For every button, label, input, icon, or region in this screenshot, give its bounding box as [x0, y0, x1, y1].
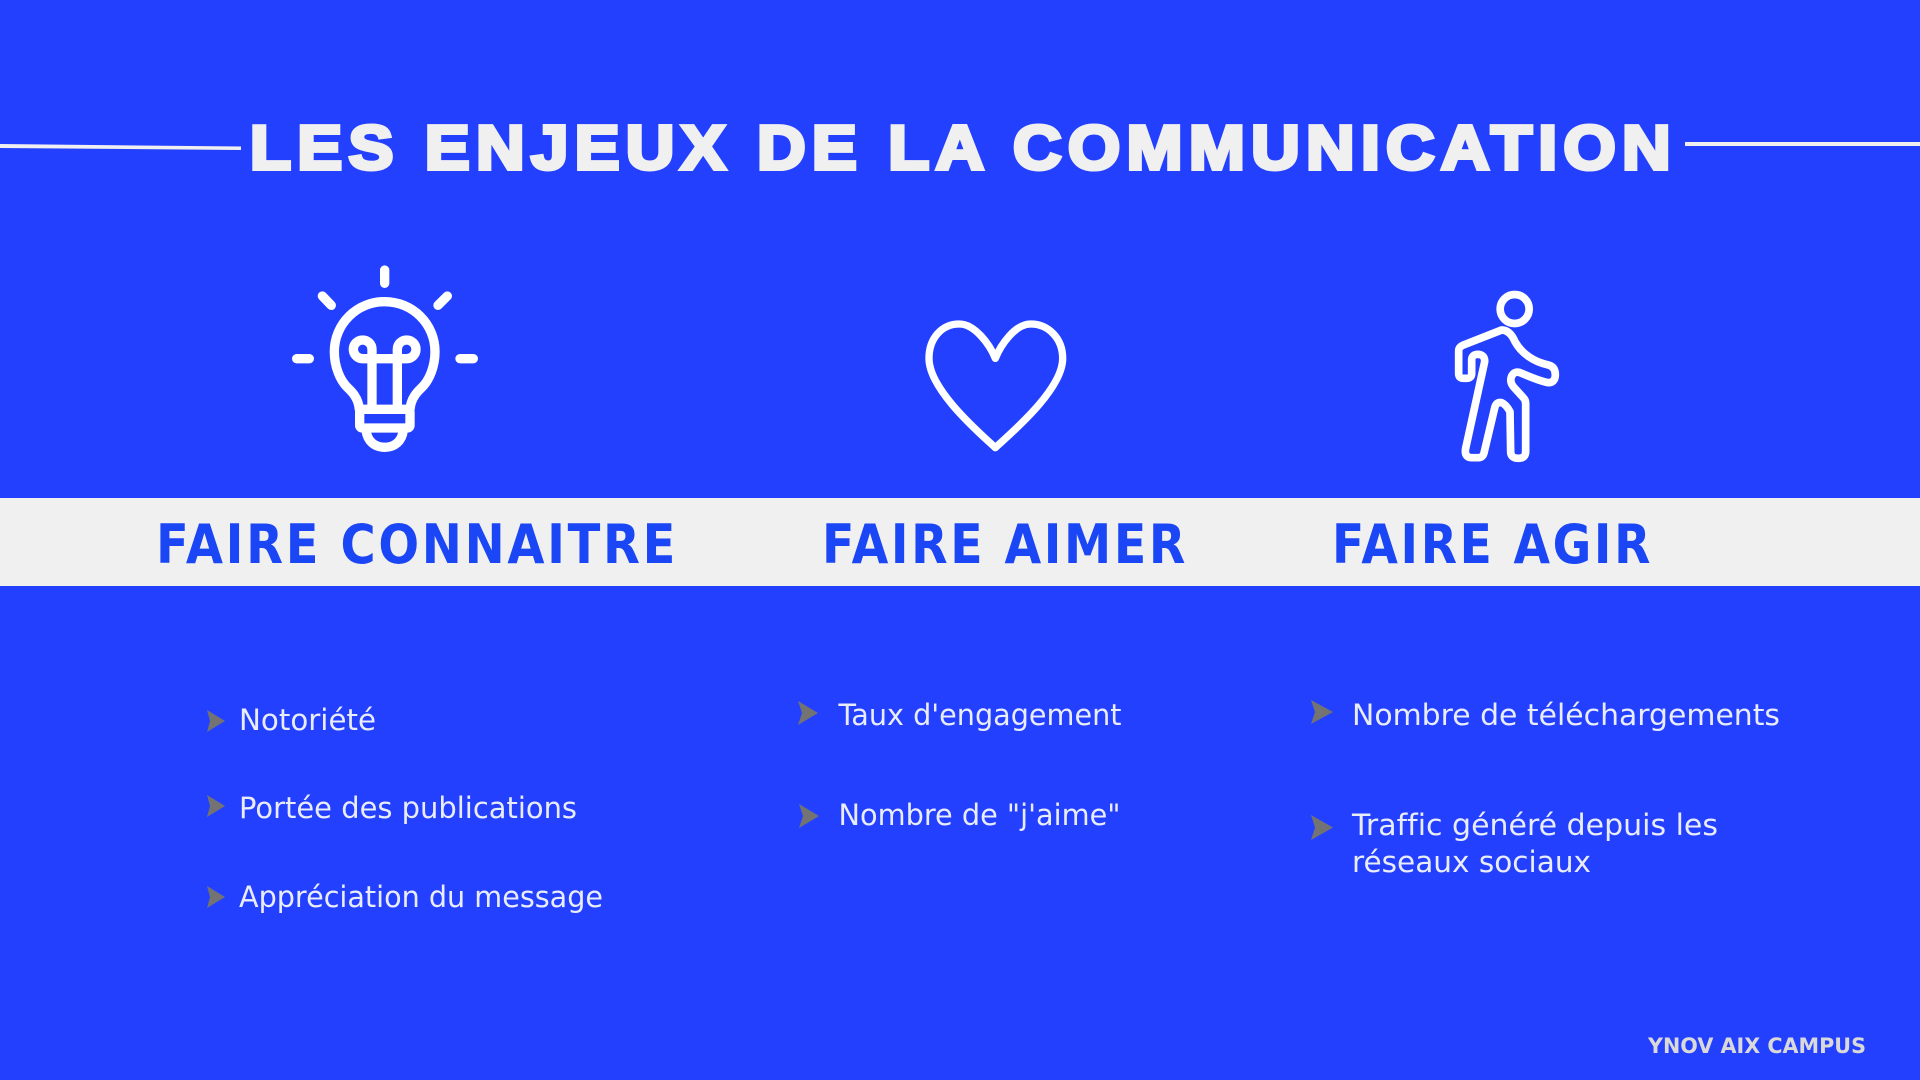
footer credit: YNOV AIX CAMPUS	[1647, 1034, 1866, 1058]
icon: light bulb	[297, 270, 473, 447]
column 3 list: Traffic généré depuis les	[1351, 808, 1718, 842]
column 1 list: Appréciation du message	[239, 880, 603, 914]
heading band	[0, 498, 1920, 586]
column 2 list: Taux d'engagement	[838, 698, 1122, 732]
title text: LES ENJEUX DE LA COMMUNICATION	[250, 114, 1677, 183]
title with side rules	[0, 114, 1920, 183]
column 3 list: Nombre de téléchargements	[1352, 698, 1780, 732]
column 3 list: réseaux sociaux	[1352, 845, 1591, 879]
icon: heart	[929, 324, 1063, 448]
heading: faire aimer: FAIRE AIMER	[822, 513, 1188, 576]
icon: walking person	[1459, 294, 1555, 458]
column 2 list	[798, 698, 1122, 832]
heading: faire agir: FAIRE AGIR	[1332, 513, 1653, 576]
column 2 list: Nombre de "j'aime"	[838, 798, 1120, 832]
column 1 list: Portée des publications	[239, 791, 577, 825]
column 1 list: Notoriété	[239, 703, 376, 737]
column 3 list	[1311, 698, 1780, 879]
heading: faire connaitre: FAIRE CONNAITRE	[156, 513, 678, 576]
column 1 list	[207, 703, 603, 914]
